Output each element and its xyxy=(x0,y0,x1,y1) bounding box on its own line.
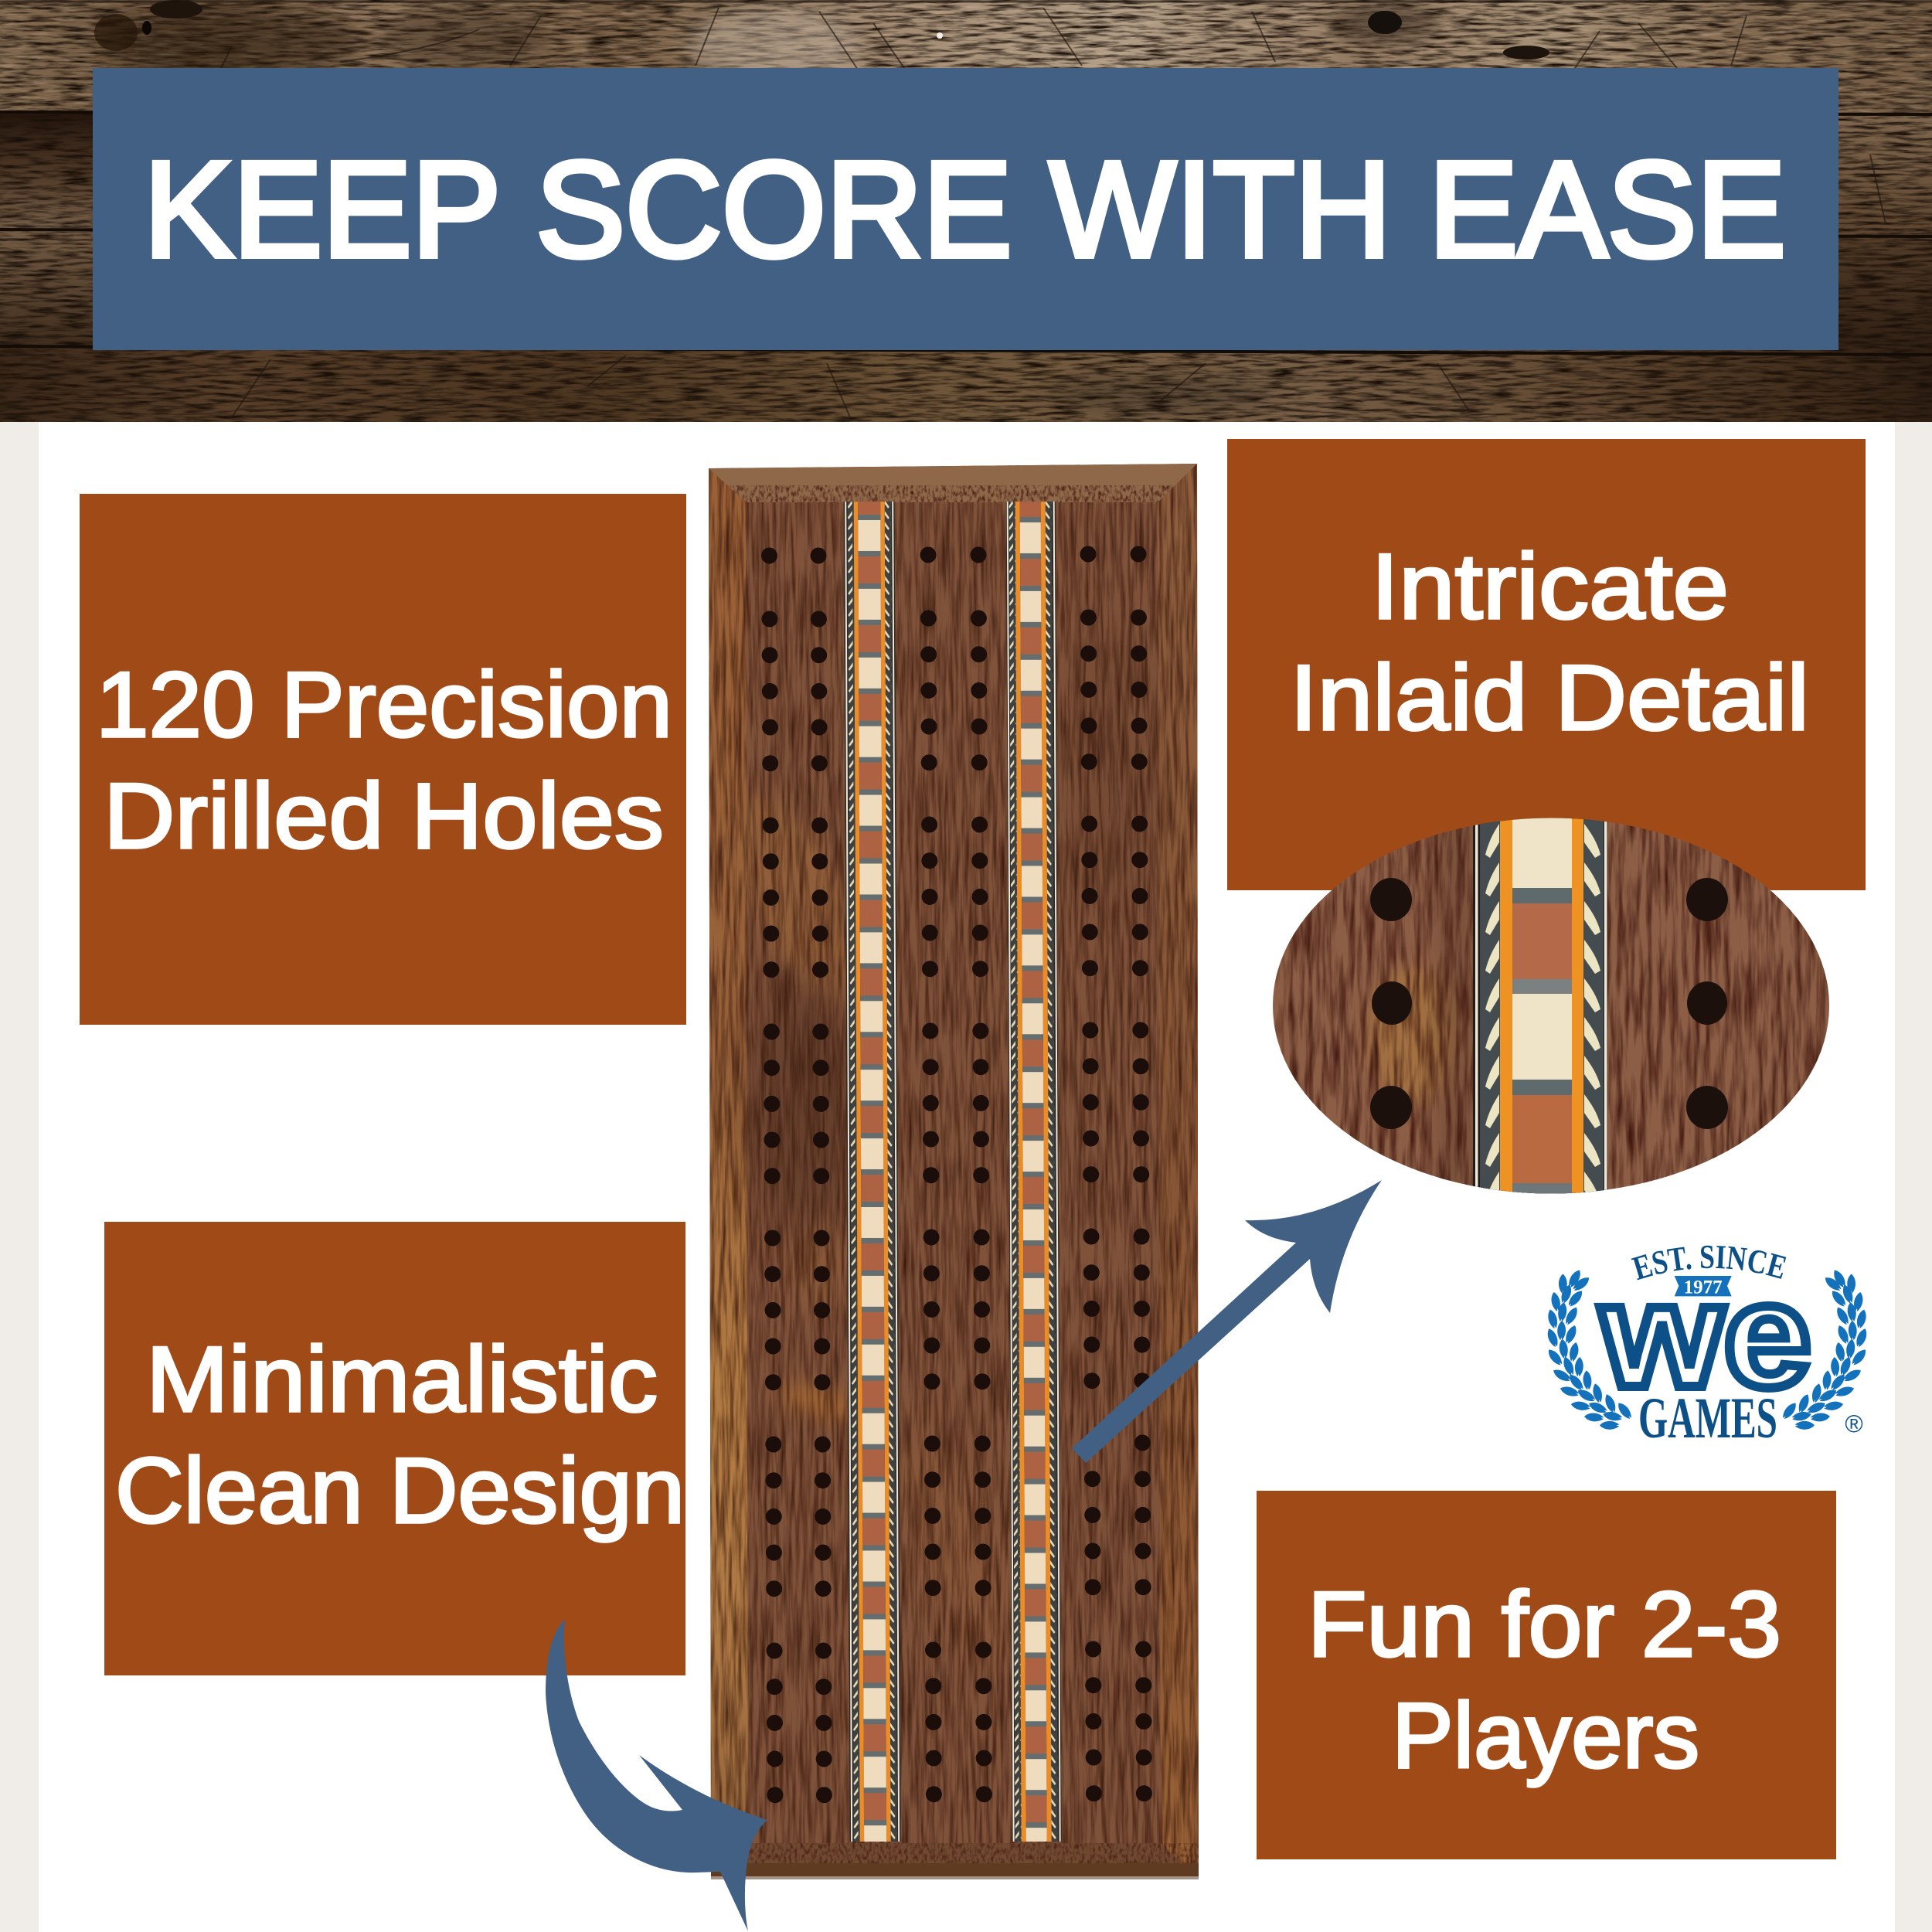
logo year banner: 1977 xyxy=(1684,1276,1723,1298)
panel: minimalistic clean design xyxy=(104,1222,685,1675)
arrow: board to detail lens xyxy=(1072,1180,1382,1463)
panel: 120 precision drilled holes xyxy=(80,494,686,1025)
panel: 120 precision drilled holes: 120 Precision xyxy=(96,653,672,757)
skewed contents: inlays and holes xyxy=(761,502,1152,1842)
icon: right laurel xyxy=(1781,1268,1869,1430)
panel: minimalistic clean design: Minimalistic xyxy=(146,1328,658,1431)
panel: intricate inlaid detail xyxy=(1227,439,1866,890)
icon: left laurel xyxy=(1545,1268,1634,1430)
wood plank header background xyxy=(0,0,1932,422)
title banner xyxy=(93,68,1838,350)
title text: KEEP SCORE WITH EASE xyxy=(144,134,1786,286)
panel: intricate inlaid detail: Intricate xyxy=(1371,535,1729,638)
panel: fun for 2-3 players: Fun for 2-3 xyxy=(1308,1573,1781,1676)
logo: WE Games: EST. SINCE xyxy=(1631,1246,1787,1280)
logo: WE Games xyxy=(1547,1246,1867,1451)
logo registered mark: ® xyxy=(1845,1410,1863,1437)
arrow: design panel to board corner xyxy=(546,1619,767,1931)
panel: fun for 2-3 players xyxy=(1257,1491,1836,1859)
cribbage board xyxy=(701,461,1206,1883)
inlay strip 1 xyxy=(844,502,901,1842)
logo year banner xyxy=(1675,1276,1732,1298)
panel: fun for 2-3 players: Players xyxy=(1392,1684,1699,1787)
inlay strip 2 xyxy=(1006,502,1062,1842)
logo games text: GAMES xyxy=(1638,1386,1777,1451)
bottom bevel xyxy=(747,1843,1182,1863)
logo arc text xyxy=(1637,1268,1785,1281)
panel: intricate inlaid detail: Inlaid Detail xyxy=(1290,646,1809,750)
panel: 120 precision drilled holes: Drilled Holes xyxy=(104,764,664,868)
magnified inlay detail lens xyxy=(1267,811,1839,1199)
board body xyxy=(701,461,1206,1883)
peg holes xyxy=(761,546,1152,1803)
logo we wordmark: we xyxy=(1600,1251,1811,1418)
panel: minimalistic clean design: Clean Design xyxy=(115,1439,685,1543)
top bevel xyxy=(709,464,1197,502)
